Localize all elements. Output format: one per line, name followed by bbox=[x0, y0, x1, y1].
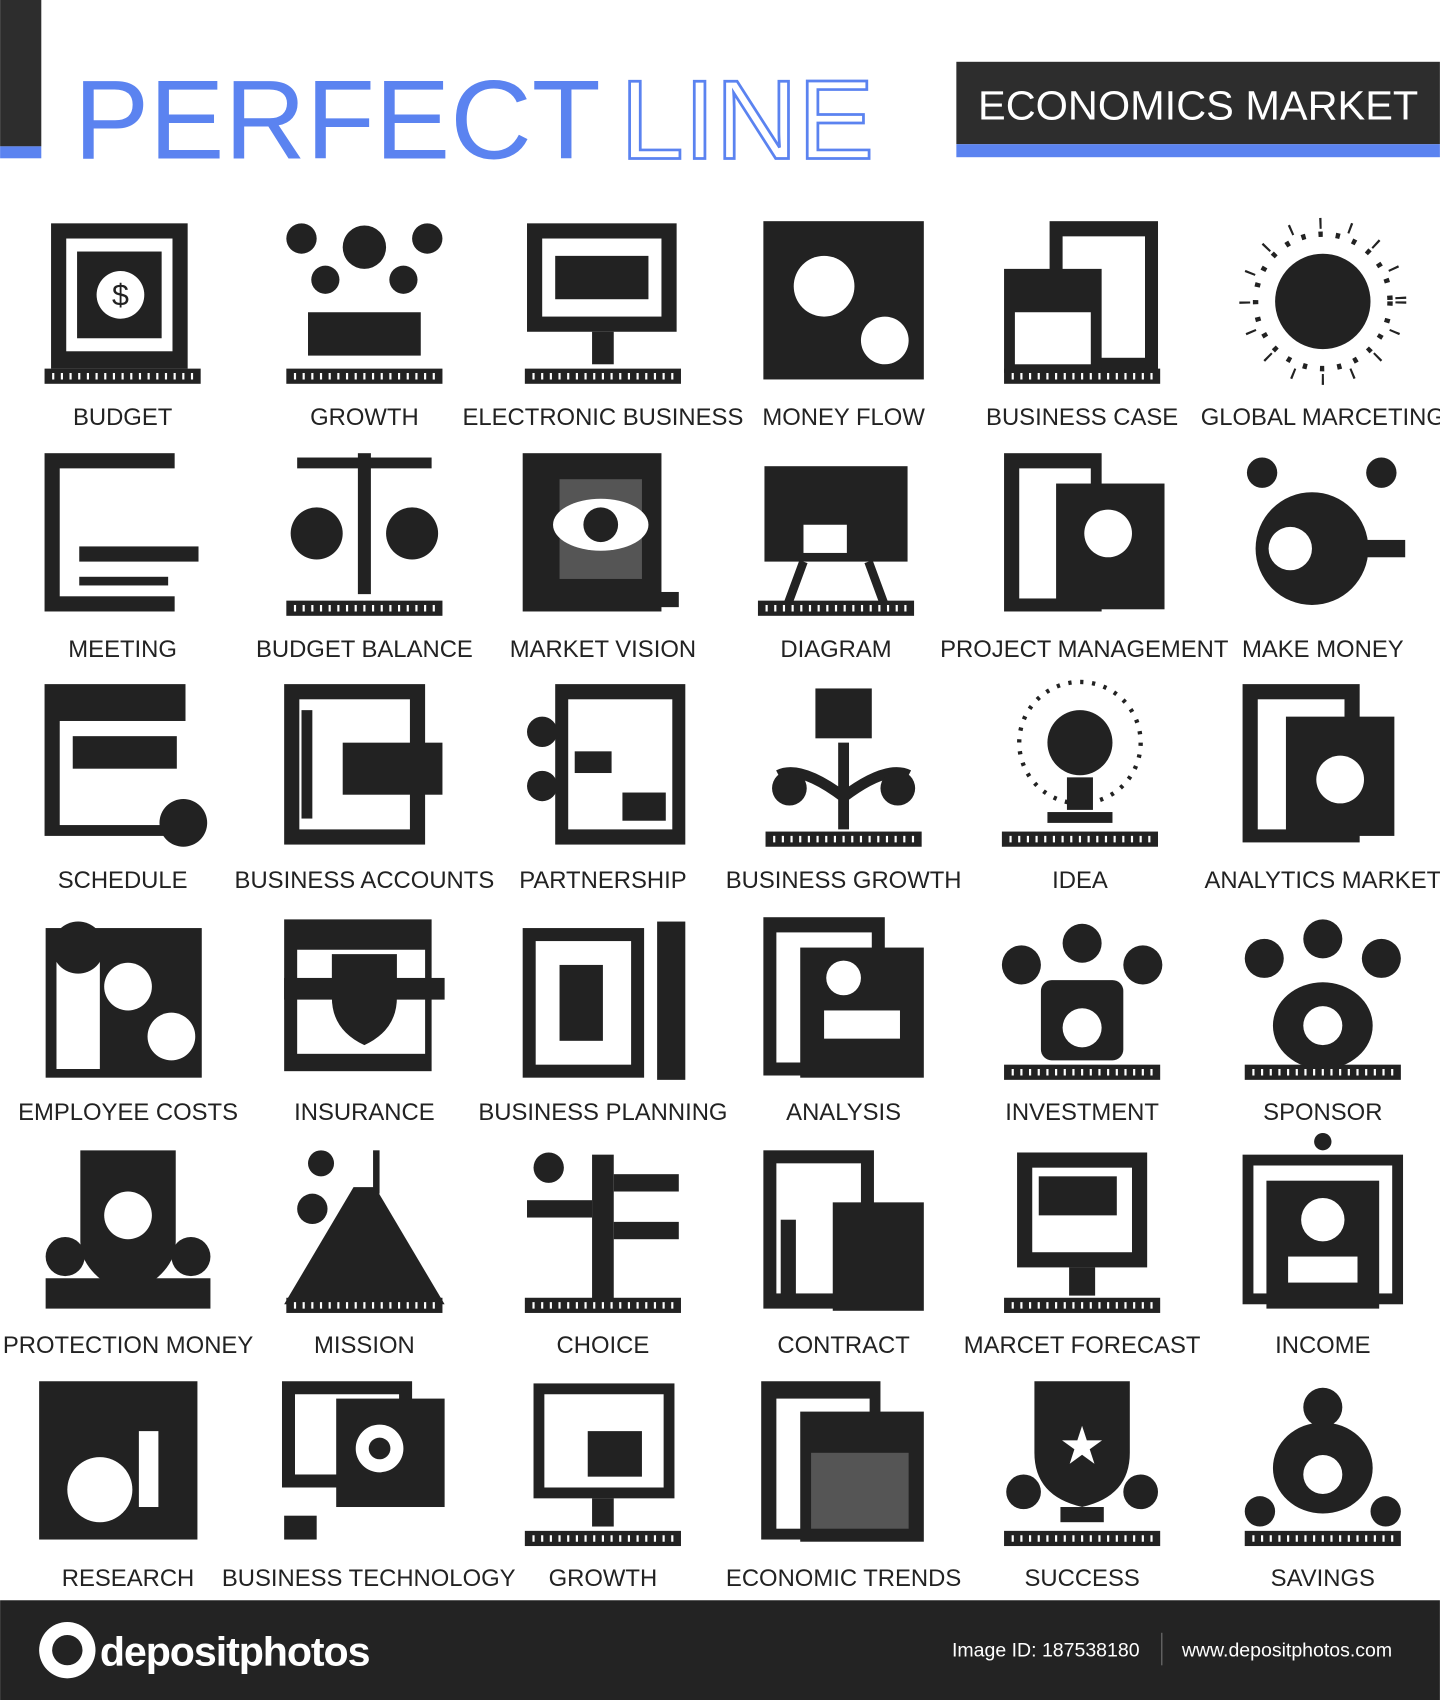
icon grid: ★ bbox=[1059, 1418, 1105, 1476]
row 5 bbox=[3, 1150, 253, 1359]
icon grid: CONTRACT bbox=[777, 1332, 910, 1359]
footer bbox=[0, 1600, 1440, 1700]
icon grid: MARKET VISION bbox=[510, 636, 696, 663]
icon grid: BUSINESS TECHNOLOGY bbox=[222, 1565, 516, 1592]
header badge: ECONOMICS MARKET bbox=[978, 82, 1418, 128]
row 4 bbox=[18, 922, 238, 1126]
row 5: PROTECTION MONEY bbox=[3, 1332, 253, 1359]
icon grid: ELECTRONIC BUSINESS bbox=[462, 404, 743, 431]
row 2: MEETING bbox=[68, 636, 177, 663]
icon grid: CHOICE bbox=[557, 1332, 649, 1359]
row 6: RESEARCH bbox=[62, 1565, 194, 1592]
header: left block bbox=[0, 0, 41, 158]
icon grid: MAKE MONEY bbox=[1242, 636, 1404, 663]
title: line: LINE bbox=[620, 56, 874, 182]
icon grid: PROJECT MANAGEMENT bbox=[940, 636, 1229, 663]
icon grid: BUSINESS PLANNING bbox=[478, 1099, 727, 1126]
row 1 bbox=[45, 223, 201, 431]
icon grid: DIAGRAM bbox=[780, 636, 892, 663]
header badge bbox=[956, 62, 1440, 157]
icon grid: ANALYTICS MARKET bbox=[1204, 867, 1440, 894]
icon grid: GROWTH bbox=[310, 404, 419, 431]
icon grid: INVESTMENT bbox=[1005, 1099, 1159, 1126]
icon grid: ANALYSIS bbox=[786, 1099, 901, 1126]
icon grid: MONEY FLOW bbox=[762, 404, 925, 431]
row 4: EMPLOYEE COSTS bbox=[18, 1099, 238, 1126]
icon grid: GROWTH bbox=[549, 1565, 657, 1592]
icon grid: INSURANCE bbox=[294, 1099, 435, 1126]
footer image id: Image ID: 187538180 bbox=[952, 1640, 1140, 1662]
row 2 bbox=[45, 453, 199, 663]
footer logo: depositphotos bbox=[100, 1628, 370, 1674]
icon grid: BUSINESS ACCOUNTS bbox=[235, 867, 494, 894]
row 6 bbox=[39, 1381, 197, 1592]
footer url: www.depositphotos.com bbox=[1181, 1640, 1392, 1662]
icon grid: INCOME bbox=[1275, 1332, 1370, 1359]
icon grid: SPONSOR bbox=[1263, 1099, 1382, 1126]
icon grid: BUSINESS GROWTH bbox=[726, 867, 962, 894]
row 3: SCHEDULE bbox=[58, 867, 188, 894]
icon grid: SUCCESS bbox=[1024, 1565, 1140, 1592]
icon grid: ECONOMIC TRENDS bbox=[726, 1565, 961, 1592]
row 3 bbox=[45, 684, 207, 894]
icon grid: BUDGET BALANCE bbox=[256, 636, 473, 663]
icon grid: PARTNERSHIP bbox=[519, 867, 687, 894]
icon grid: MISSION bbox=[314, 1332, 415, 1359]
icon grid: IDEA bbox=[1052, 867, 1108, 894]
icon grid: MARCET FORECAST bbox=[964, 1332, 1201, 1359]
icon grid: GLOBAL MARCETING bbox=[1201, 404, 1440, 431]
row 1: BUDGET bbox=[73, 404, 173, 431]
footer logo bbox=[39, 1622, 370, 1678]
title: PERFECT bbox=[74, 56, 601, 182]
icon grid: SAVINGS bbox=[1271, 1565, 1375, 1592]
icon grid: BUSINESS CASE bbox=[986, 404, 1178, 431]
